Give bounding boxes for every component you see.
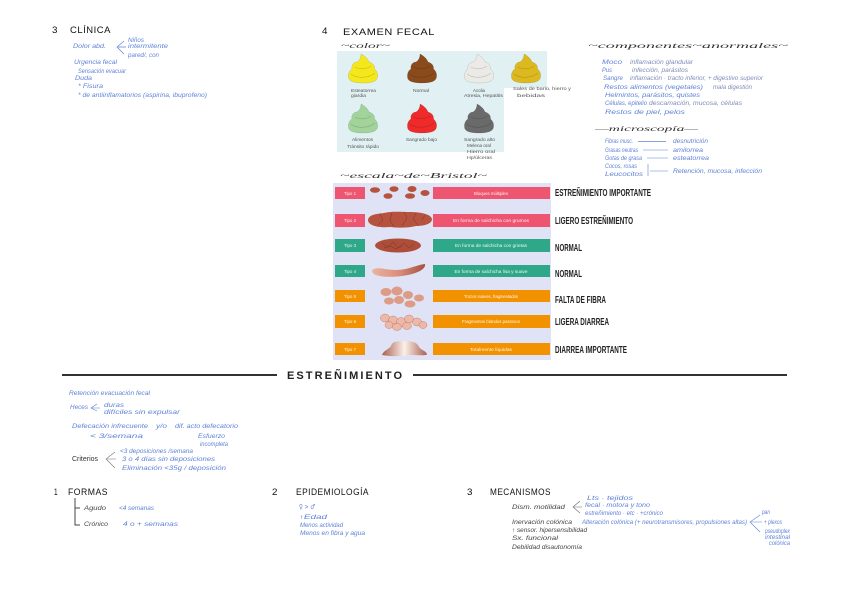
list: epidemiología: Menos en fibra y agua <box>300 531 366 537</box>
text: disminución motilidad: Dism. motilidad <box>512 505 566 511</box>
list: otros mecanismos: ↑ sensor. hipersensibilidad <box>512 528 588 534</box>
list: componentes: Sangre <box>603 76 624 82</box>
text: heces: duras <box>104 403 124 409</box>
text: dolor abdominal: pared/, con <box>127 53 160 59</box>
row: tipo 1: Bloques múltiples <box>474 191 509 196</box>
row: tipo 4: NORMAL <box>555 269 582 280</box>
labels: colores: Acolia <box>473 88 485 93</box>
text: síntomas: Urgencia fecal <box>74 60 118 66</box>
list: componentes: inflamación · tracto inferior, + digestivo superior <box>630 76 764 82</box>
list: epidemiología: Menos actividad <box>300 523 344 529</box>
text: defecación infrecuente: dif. acto defecatorio <box>175 424 239 430</box>
section: componentes anormales <box>588 41 788 178</box>
text: heces <box>70 403 181 416</box>
text: agudo: <4 semanas <box>119 506 154 512</box>
row: tipo 6: Fragmentos blandos pastosos <box>462 319 521 324</box>
row: tipo 2: En forma de salchicha con grumos <box>453 218 530 223</box>
labels: colores: Sangrado bajo <box>406 137 437 142</box>
list: microscopía: Grasas neutras <box>605 148 638 154</box>
text: criterios <box>72 449 227 472</box>
labels: colores: Esteatorrea <box>351 88 376 93</box>
list: componentes: mala digestión <box>713 85 753 91</box>
row: tipo 6: Tipo 6 <box>344 319 357 324</box>
icon: heces verdes <box>348 104 378 133</box>
list: microscopía: Gotas de grasa <box>605 156 643 162</box>
icon: heces blancas <box>464 54 494 83</box>
heading: mecanismos: MECANISMOS <box>490 487 551 497</box>
row: tipo 1 <box>335 186 651 199</box>
subheading: microscopía: —microscopía— <box>593 124 699 133</box>
row: tipo 7: Tipo 7 <box>344 347 357 352</box>
heading: epidemiología: EPIDEMIOLOGÍA <box>296 487 369 497</box>
text: defecación infrecuente: Esfuerzo <box>198 434 226 440</box>
text: defecación infrecuente: y/o <box>155 424 168 430</box>
text: heces: Heces <box>70 405 88 411</box>
heading: epidemiología: 2 <box>272 487 278 497</box>
text: defecación infrecuente: < 3/semana <box>90 434 144 440</box>
text: disminución motilidad: fecal · motora y tono <box>585 503 651 509</box>
text: disminución motilidad <box>512 496 664 517</box>
text: síntomas: Duda <box>75 76 93 82</box>
heading: clínica: CLÍNICA <box>70 25 111 35</box>
text: defecación infrecuente: incompleta <box>200 442 229 448</box>
list: componentes: Restos alimentos (vegetales) <box>604 85 703 91</box>
heading: examen fecal <box>322 26 435 37</box>
text: dolor abdominal <box>73 38 169 59</box>
text: retención: Retención evacuación fecal <box>69 391 151 397</box>
list: microscopía: esteatorrea <box>673 156 710 162</box>
list: microscopía: Cocos, rosas <box>605 164 637 170</box>
text: inervación colónica: pan <box>761 510 771 516</box>
list: microscopía: Retención, mucosa, infección <box>673 169 763 175</box>
text: inervación colónica: Alteración colónica (+ neurotransmisores, propulsiones altas) <box>581 520 747 526</box>
list: componentes: descamación, mucosa, células <box>649 101 742 107</box>
list: otros mecanismos: Sx. funcional <box>512 536 559 542</box>
icon: heces marrones <box>407 54 437 83</box>
row: tipo 5: FALTA DE FIBRA <box>555 295 606 306</box>
labels: colores: Normal <box>413 88 429 93</box>
list: componentes: Pus <box>602 68 612 74</box>
icon: heces amarillas <box>348 54 378 83</box>
labels: colores: Melena oral <box>467 143 491 148</box>
text: inervación colónica: intestinal <box>765 535 791 541</box>
text: dolor abdominal: intermitente <box>128 44 169 50</box>
text: crónico: 4 o + semanas <box>123 522 178 528</box>
icon: heces doradas <box>511 54 541 83</box>
list: epidemiología: ♀ > ♂ <box>299 503 315 511</box>
labels: colores <box>347 86 572 160</box>
list: componentes: Restos de piel, pelos <box>605 110 685 116</box>
panel: escala de Bristol <box>333 183 651 360</box>
section: definición <box>69 391 239 472</box>
list: microscopía: Leucocitos <box>605 172 643 178</box>
row: tipo 5: Tipo 5 <box>344 294 357 299</box>
section: formas <box>54 487 178 528</box>
text: dolor abdominal: Niños <box>128 38 144 44</box>
labels: colores: giardia <box>351 93 366 98</box>
list: otros mecanismos: Debilidad disautonomía <box>512 545 583 551</box>
row: tipo 3 <box>335 238 582 254</box>
panel: colores de heces <box>337 51 572 160</box>
list: componentes <box>602 60 764 116</box>
list: microscopía: desnutrición <box>673 139 709 145</box>
list: otros mecanismos <box>512 528 588 551</box>
row: tipo 2: LIGERO ESTREÑIMIENTO <box>555 214 633 227</box>
list: microscopía: amilorrea <box>673 148 704 154</box>
labels: colores: Sales de bario, hierro y <box>513 86 572 91</box>
row: tipo 5 <box>335 286 606 308</box>
text: criterios: Eliminación <35g / deposición <box>122 466 227 472</box>
text: agudo: Agudo <box>83 506 107 512</box>
text: síntomas <box>74 60 207 99</box>
labels: colores: bebidas <box>517 93 546 98</box>
text: inervación colónica <box>512 510 791 547</box>
text: criterios: 3 o 4 días sin deposiciones <box>122 457 215 463</box>
labels: colores: Alimentos <box>352 137 374 142</box>
section: mecanismos <box>467 487 791 551</box>
bracket <box>75 498 80 525</box>
labels: colores: Sangrado alto <box>464 137 495 142</box>
text: defecación infrecuente <box>72 424 239 448</box>
text: criterios: <3 deposiciones /semana <box>120 449 194 455</box>
list: epidemiología <box>299 503 366 537</box>
heading: clínica: 3 <box>52 25 58 35</box>
row: tipo 1: Tipo 1 <box>344 191 357 196</box>
row: tipo 3: Tipo 3 <box>344 243 357 248</box>
text: disminución motilidad: estreñimiento · etc · +crónico <box>585 511 664 517</box>
labels: colores: Tránsito rápido <box>347 144 379 149</box>
heading: clínica <box>52 25 111 35</box>
row: tipo 2: Tipo 2 <box>344 218 357 223</box>
list: componentes: inflamación glandular <box>630 60 694 66</box>
list: componentes: Células, epitelio <box>605 101 648 107</box>
row: tipo 6: LIGERA DIARREA <box>555 317 609 328</box>
list: microscopía <box>605 139 763 178</box>
heading: mecanismos: 3 <box>467 487 473 497</box>
row: tipo 7 <box>335 341 627 356</box>
row: tipo 3: En forma de salchicha con grietas <box>455 243 528 248</box>
list: componentes: Helmintos, parásitos, quistes <box>605 93 700 99</box>
row: tipo 3: NORMAL <box>555 243 582 254</box>
row: tipo 5: Trozos suaves, fragmentados <box>464 294 519 299</box>
section: clínica <box>52 25 207 99</box>
row: tipo 2 <box>335 212 633 228</box>
text: inervación colónica: Inervación colónica <box>512 520 573 526</box>
icon: heces rojas <box>407 104 437 133</box>
text: crónico <box>84 522 178 528</box>
row: tipo 7: Totalmente líquidas <box>470 347 513 352</box>
row: tipo 6 <box>335 314 609 330</box>
icon: heces grises <box>464 104 494 133</box>
heading: formas: 1 <box>54 487 58 497</box>
labels: colores: Hp/úlceras <box>467 155 493 160</box>
heading: formas: FORMAS <box>68 487 108 497</box>
row: tipo 4: Tipo 4 <box>344 269 357 274</box>
text: dolor abdominal: Dolor abd. <box>73 44 106 50</box>
list: componentes: Moco <box>602 60 623 66</box>
row: tipo 4: En forma de salchicha lisa y suave <box>454 269 528 274</box>
text: criterios: Criterios <box>72 456 98 463</box>
text: síntomas: Sensación evacuar <box>78 69 127 75</box>
text: disminución motilidad: Lts · tejidos <box>587 496 633 502</box>
text: crónico: Crónico <box>84 522 109 528</box>
labels: colores: Hierro oral <box>467 149 495 154</box>
list: componentes: infección, parásitos <box>632 68 688 74</box>
text: inervación colónica: pseudoplex <box>764 529 791 535</box>
subheading: color: ~color~ <box>341 41 390 50</box>
text: agudo <box>83 506 154 512</box>
row: tipo 7: DIARREA IMPORTANTE <box>555 345 627 356</box>
heading: examen fecal: EXAMEN FECAL <box>343 27 435 37</box>
text: heces: difíciles sin expulsar <box>104 410 181 416</box>
text: síntomas: * Fisura <box>78 84 104 90</box>
list: epidemiología: ↑Edad <box>299 515 328 521</box>
section: epidemiología <box>272 487 369 537</box>
text: inervación colónica: + plexos <box>764 520 782 526</box>
row: tipo 4 <box>335 264 582 280</box>
subheading: componentes anormales: ~componentes~anormales~ <box>588 41 788 50</box>
row: tipo 1: ESTREÑIMIENTO IMPORTANTE <box>555 186 651 199</box>
list: microscopía: Fibras musc. <box>605 139 633 145</box>
text: inervación colónica: colónica <box>769 541 791 547</box>
text: síntomas: * de antiinflamatorios (aspirina, ibuprofeno) <box>78 93 207 99</box>
heading: mecanismos <box>467 487 551 497</box>
text: defecación infrecuente: Defecación infrecuente <box>72 424 149 430</box>
subheading: escala de Bristol: ~escala~de~Bristol~ <box>340 171 487 180</box>
heading: examen fecal: 4 <box>322 26 328 36</box>
title: estreñimiento: ESTREÑIMIENTO <box>287 369 402 382</box>
labels: colores: Atresia, Hepatitis <box>464 93 504 98</box>
